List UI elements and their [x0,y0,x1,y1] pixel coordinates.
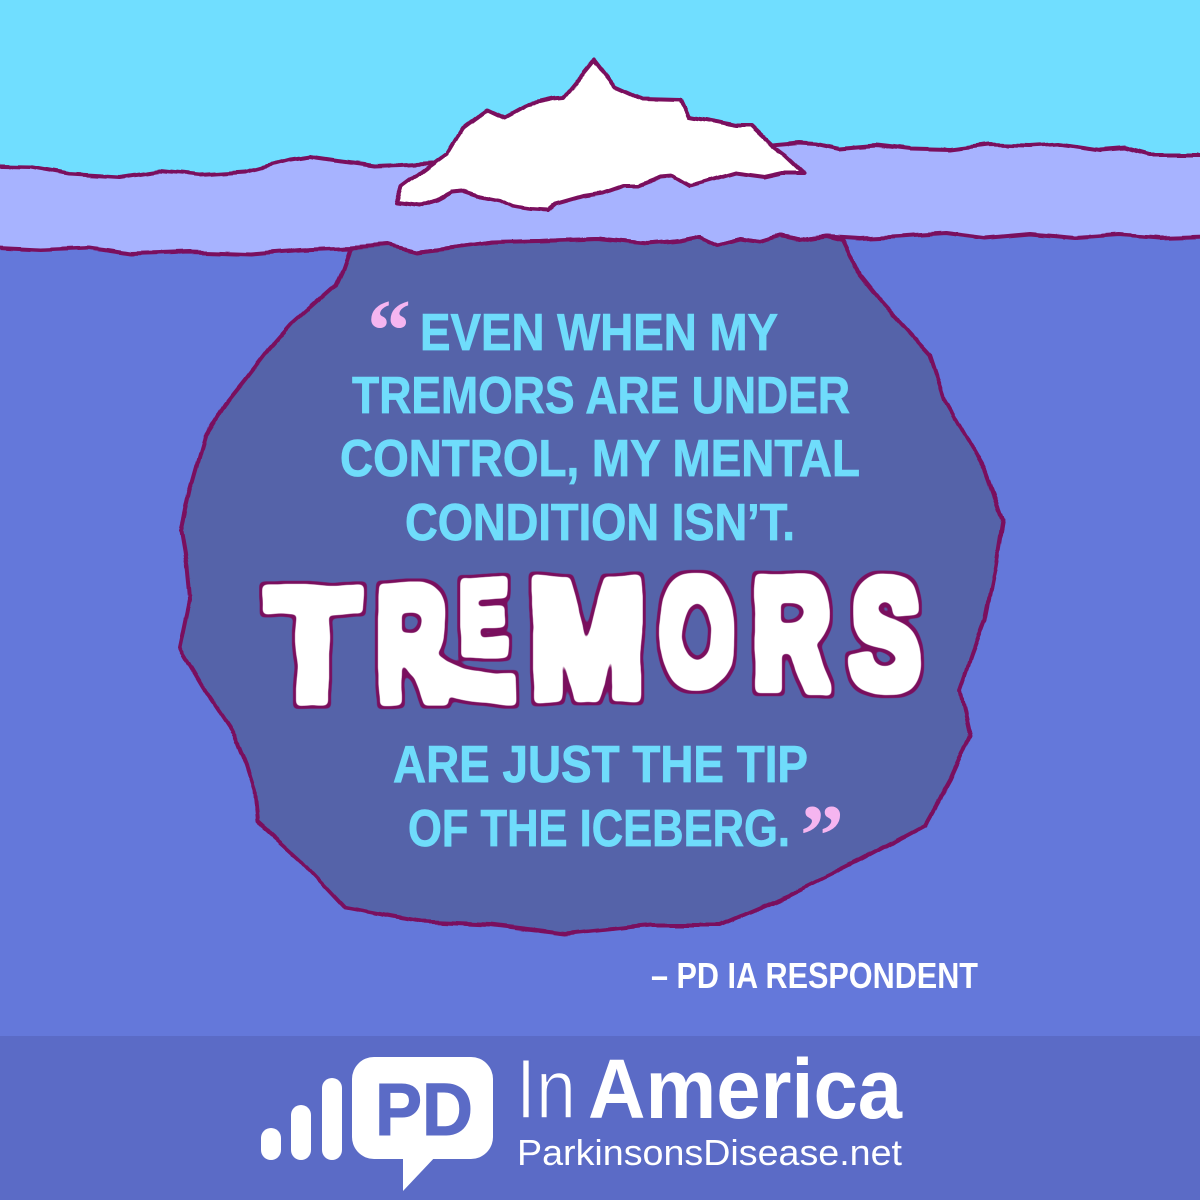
quote text: first part [340,304,860,552]
quote text: first part: EVEN WHEN MY [420,304,778,362]
logo: speech bubble with PD [352,1057,493,1191]
attribution: – PD IA RESPONDENT [651,955,978,996]
headline word: TREMORS: O [660,551,734,715]
headline word: TREMORS: M [529,546,645,732]
headline word: TREMORS: R [753,545,830,722]
headline word: TREMORS [267,545,920,734]
iceberg: visible tip [397,60,804,211]
quote text: first part: TREMORS ARE UNDER [352,367,850,425]
quote text: second part: ARE JUST THE TIP [393,736,808,794]
logo: speech bubble with PD: PD [375,1068,473,1151]
distant sea band [0,142,1200,270]
headline word: TREMORS: T [267,556,359,734]
logo: In America wordmark: America [588,1042,903,1136]
quote text: second part [393,736,808,858]
quote text: first part: CONTROL, MY MENTAL [340,430,860,488]
sky background [0,0,1200,260]
headline word: TREMORS: R [377,555,446,733]
headline word: TREMORS: E [461,558,506,675]
logo: website address: ParkinsonsDisease.net [517,1132,902,1173]
logo: signal bars icon [261,1078,342,1160]
iceberg: submerged mass [180,236,1003,934]
footer band [0,1036,1200,1200]
headline word: TREMORS: S [851,548,920,721]
quote text: first part: CONDITION ISN’T. [405,494,795,552]
closing quotation mark: ” [800,788,844,885]
opening quotation mark: “ [367,283,411,380]
quote text: second part: OF THE ICEBERG. [408,800,790,858]
logo: In America wordmark: In [516,1042,576,1136]
